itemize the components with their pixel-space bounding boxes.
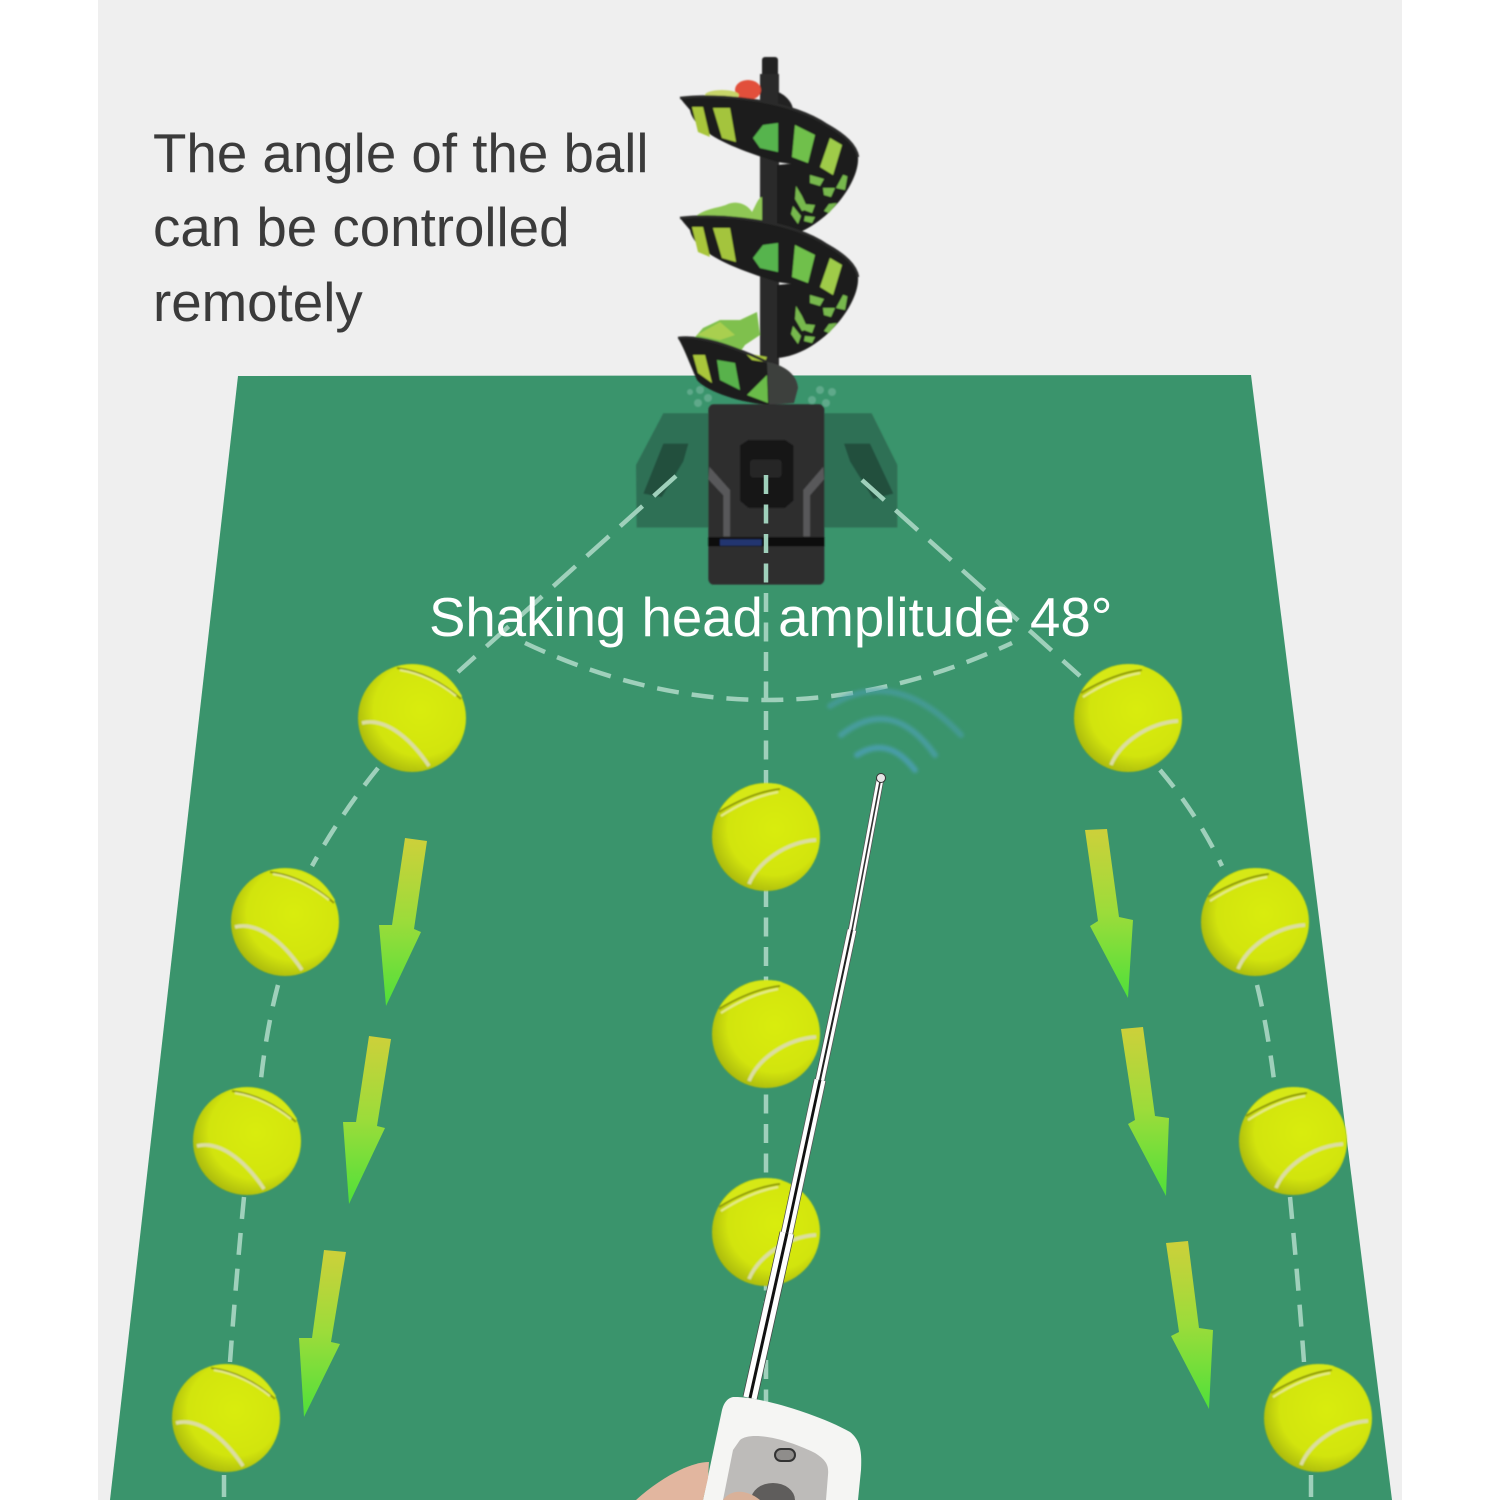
LED indicator — [775, 1449, 795, 1461]
court — [110, 375, 1392, 1500]
remote control — [636, 774, 886, 1500]
telescopic antenna — [750, 774, 886, 1398]
left arrows — [299, 838, 427, 1417]
spiral hopper — [678, 57, 858, 405]
centre tennis balls — [712, 783, 820, 1286]
machine body — [708, 404, 824, 585]
left trajectory — [224, 768, 378, 1500]
left tennis balls — [172, 664, 466, 1472]
centre line — [764, 475, 768, 1500]
dashed paths — [224, 475, 1311, 1500]
title text: The angle of the ball — [153, 122, 649, 184]
fingers — [636, 1462, 709, 1500]
remote body — [703, 1397, 861, 1500]
right trajectory — [1160, 770, 1311, 1500]
swing amplitude arc — [525, 643, 1012, 700]
wireless signal icon — [830, 691, 961, 770]
machine side wings — [636, 413, 897, 527]
remote keypad — [723, 1436, 828, 1500]
title text: remotely — [153, 271, 363, 333]
title text: can be controlled — [153, 196, 570, 258]
caption: shaking head amplitude: Shaking head amplitude 48° — [429, 587, 1113, 648]
perforated base shadow — [687, 386, 836, 407]
right arrows — [1085, 829, 1213, 1409]
left swing line — [458, 476, 676, 672]
right tennis balls — [1074, 664, 1372, 1472]
title text — [153, 122, 649, 333]
ball machine — [636, 57, 897, 585]
right swing line — [862, 480, 1080, 676]
dark button — [751, 1483, 795, 1500]
